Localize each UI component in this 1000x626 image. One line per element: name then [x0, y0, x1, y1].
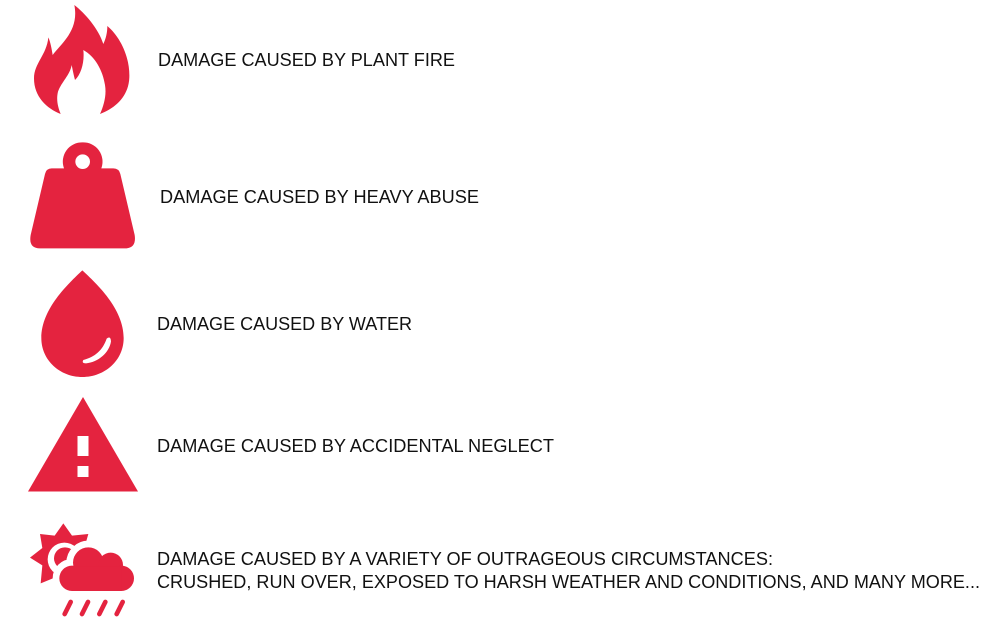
text: water: DAMAGE CAUSED BY WATER — [157, 313, 412, 334]
icon: flame — [34, 5, 129, 114]
icon: sun, cloud and rain — [30, 523, 134, 614]
text: plant fire: DAMAGE CAUSED BY PLANT FIRE — [158, 49, 455, 70]
text: outrageous circumstances — [157, 548, 980, 592]
icon: warning triangle — [28, 397, 138, 492]
icon: water drop — [41, 270, 124, 377]
text: outrageous circumstances: CRUSHED, RUN OVER, EXPOSED TO HARSH WEATHER AND CONDITIONS, AND MANY MORE... — [157, 571, 980, 592]
text: accidental neglect: DAMAGE CAUSED BY ACCIDENTAL NEGLECT — [157, 435, 554, 456]
text: heavy abuse: DAMAGE CAUSED BY HEAVY ABUSE — [160, 186, 479, 207]
icon: weight — [30, 142, 135, 248]
text: outrageous circumstances: DAMAGE CAUSED BY A VARIETY OF OUTRAGEOUS CIRCUMSTANCES: — [157, 548, 773, 569]
